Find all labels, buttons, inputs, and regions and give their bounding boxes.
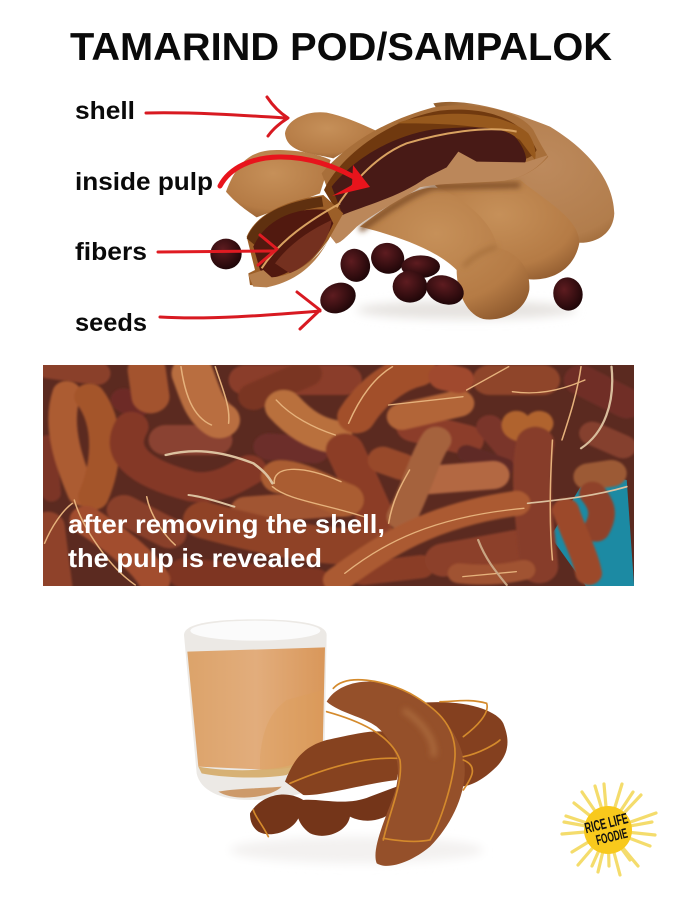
arrow: inside pulp xyxy=(220,157,370,196)
label: fibers: fibers xyxy=(75,238,147,266)
label: inside pulp: inside pulp xyxy=(75,168,213,196)
shadow under pods xyxy=(357,301,577,319)
pulp xyxy=(332,127,526,217)
open shell: small xyxy=(247,195,343,287)
shadow xyxy=(230,837,483,863)
photo: glass of tamarind juice with pulp xyxy=(184,619,507,866)
arrow: fibers xyxy=(158,235,277,265)
logo: Rice Life Foodie sun xyxy=(562,784,656,875)
logo wordmark xyxy=(583,810,633,850)
label: seeds: seeds xyxy=(75,309,147,337)
caption on photo xyxy=(68,509,385,573)
logo wordmark: RICE LIFE xyxy=(583,810,630,837)
logo wordmark: FOODIE xyxy=(594,825,629,848)
torn flap xyxy=(327,152,548,243)
caption on photo: the pulp is revealed xyxy=(68,543,322,573)
arrow: seeds xyxy=(160,292,320,329)
title: TAMARIND POD/SAMPALOK xyxy=(70,26,612,69)
pod: middle xyxy=(433,180,579,279)
caption on photo: after removing the shell, xyxy=(68,509,385,539)
open shell: large xyxy=(322,105,548,243)
pod: front xyxy=(360,188,529,319)
photo: tamarind pods and seeds xyxy=(210,102,614,319)
seeds xyxy=(210,239,585,319)
photo panel: shelled tamarind pulp xyxy=(40,360,634,590)
under layer xyxy=(48,367,627,587)
sun rays xyxy=(562,784,656,875)
label: shell: shell xyxy=(75,97,135,125)
pod: back left xyxy=(285,112,378,158)
fiber line xyxy=(335,129,517,210)
pod: left xyxy=(226,150,331,217)
pod: right back xyxy=(433,102,614,243)
shading under the open shell xyxy=(360,185,520,230)
glass xyxy=(184,619,327,800)
arrow: shell xyxy=(146,97,288,136)
pale fibers xyxy=(45,367,627,585)
pods layer xyxy=(63,370,611,580)
pods: dried pulp xyxy=(250,680,507,866)
sun disc xyxy=(584,806,632,854)
